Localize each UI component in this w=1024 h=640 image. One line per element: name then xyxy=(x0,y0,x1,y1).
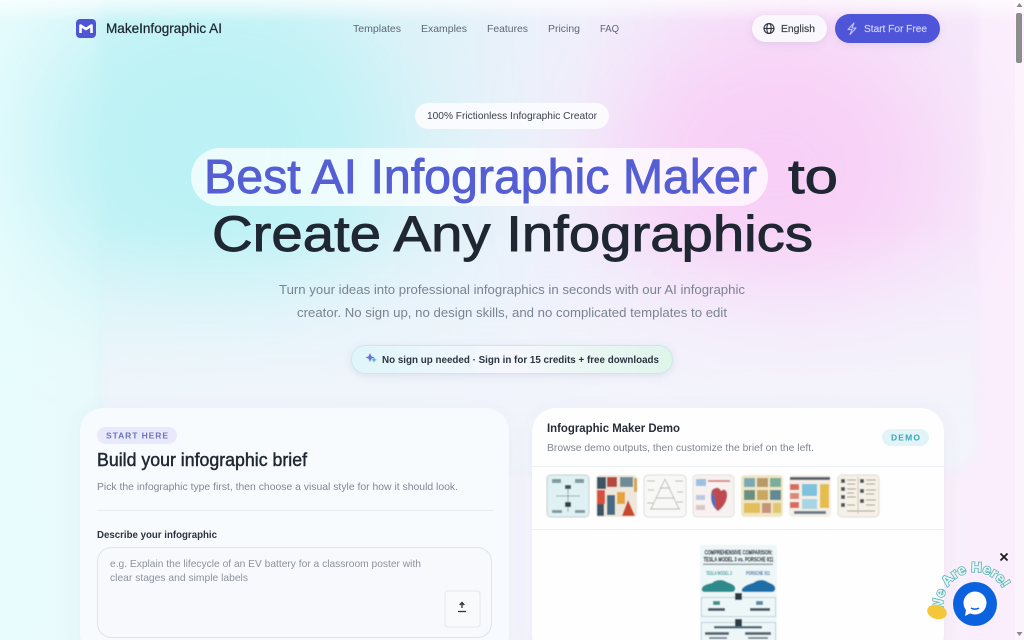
panel: infographic maker demo xyxy=(532,408,944,640)
subtitle xyxy=(279,282,746,320)
thumbnail 6 xyxy=(789,475,831,517)
start for free button: Start For Free xyxy=(864,23,927,35)
tag: demo: DEMO xyxy=(891,432,920,442)
callout: no sign up: No sign up needed · Sign in for 15 credits + free downloads xyxy=(382,354,659,366)
panel: build your infographic brief xyxy=(80,408,509,640)
poster title: TESLA MODEL 3 vs. PORSCHE 911 xyxy=(704,556,774,564)
callout: no sign up xyxy=(352,346,672,374)
icon: upload button xyxy=(445,591,480,627)
start for free button xyxy=(835,14,940,43)
demo description: Browse demo outputs, then customize the brief on the left. xyxy=(547,443,814,454)
poster title: COMPREHENSIVE COMPARISON: xyxy=(704,550,772,556)
thumbnail strip xyxy=(547,475,879,517)
thumbnail 2 xyxy=(596,475,637,517)
demo heading: Infographic Maker Demo xyxy=(547,421,680,435)
panel heading: Build your infographic brief xyxy=(97,450,308,470)
curved label: We Are Here! xyxy=(932,561,1012,608)
icon: teal car xyxy=(702,580,735,592)
hero badge: 100% Frictionless Infographic Creator xyxy=(427,110,597,122)
nav links xyxy=(353,23,619,35)
tag: demo xyxy=(882,429,929,446)
demo poster preview xyxy=(700,545,777,640)
tag: start here: START HERE xyxy=(106,430,168,440)
tag: start here xyxy=(97,427,177,444)
thumbnail 7 xyxy=(838,475,879,517)
subtitle: Turn your ideas into professional infographics in seconds with our AI infographic xyxy=(279,282,746,297)
brand name: MakeInfographic AI xyxy=(106,20,222,36)
icon: blue car xyxy=(742,580,775,592)
navigation bar xyxy=(76,14,940,43)
demo poster preview: PORSCHE 911 xyxy=(746,571,770,577)
title: Best AI Infographic Maker xyxy=(204,151,757,204)
thumbnail 4 xyxy=(693,475,734,517)
thumbnail 1 xyxy=(547,475,589,517)
nav links: Examples xyxy=(421,23,467,35)
language button xyxy=(752,15,827,42)
scrollbar xyxy=(1015,0,1024,640)
title xyxy=(191,148,838,262)
hero badge xyxy=(415,103,609,129)
textarea: e.g. Explain the lifecycle of an EV battery for a classroom poster with xyxy=(110,558,421,570)
nav links: Features xyxy=(487,23,528,35)
nav links: Templates xyxy=(353,23,401,35)
language button: English xyxy=(781,23,815,35)
thumbnail 3 xyxy=(644,475,686,517)
chat widget xyxy=(927,552,1012,626)
textarea: clear stages and simple labels xyxy=(110,572,248,584)
textarea xyxy=(98,548,492,638)
poster title xyxy=(704,550,774,564)
subtitle: creator. No sign up, no design skills, and no complicated templates to edit xyxy=(297,305,727,320)
panel description: Pick the infographic type first, then choose a visual style for how it should look. xyxy=(97,481,458,493)
field label: Describe your infographic xyxy=(97,529,217,541)
title: to xyxy=(788,151,838,204)
icon: waving hand xyxy=(926,603,948,621)
nav links: Pricing xyxy=(548,23,580,35)
nav links: FAQ xyxy=(600,23,619,35)
thumbnail 5 xyxy=(741,475,783,517)
chat button xyxy=(953,582,997,626)
icon: close xyxy=(1000,554,1008,560)
icon: logo xyxy=(76,19,96,38)
demo poster preview: TESLA MODEL 3 xyxy=(706,571,732,577)
title: Create Any Infographics xyxy=(212,206,813,262)
